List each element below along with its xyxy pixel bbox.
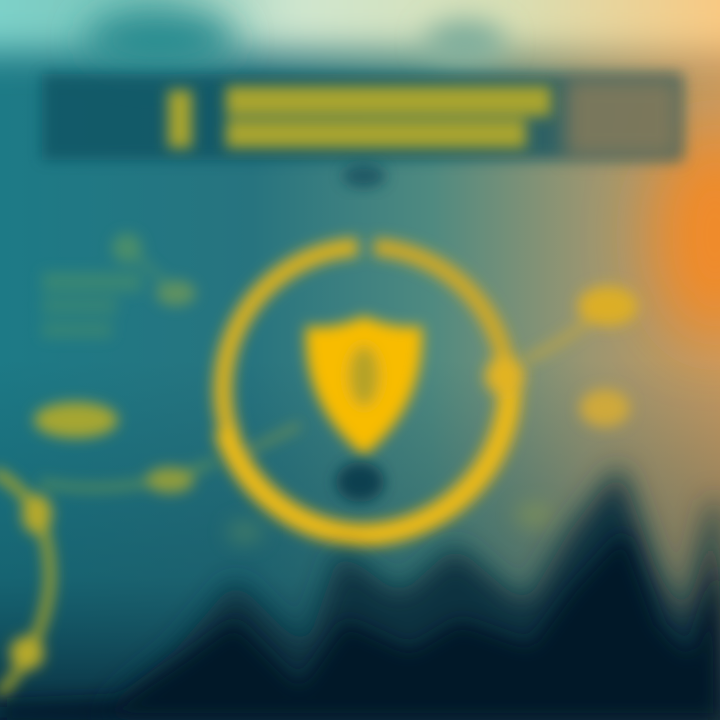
shield stem [336, 462, 384, 502]
left percentage label [34, 402, 118, 438]
title banner [42, 74, 682, 160]
shield icon [306, 316, 422, 456]
banner pointer [342, 164, 386, 188]
forest silhouette [0, 465, 720, 720]
bottom-left arc [0, 472, 52, 695]
connector from left to ring [40, 462, 215, 493]
small lower labels [227, 503, 555, 544]
central ring [223, 247, 525, 535]
left info cluster [42, 233, 196, 338]
right connector and labels [525, 286, 638, 427]
title text placeholder [168, 86, 551, 148]
